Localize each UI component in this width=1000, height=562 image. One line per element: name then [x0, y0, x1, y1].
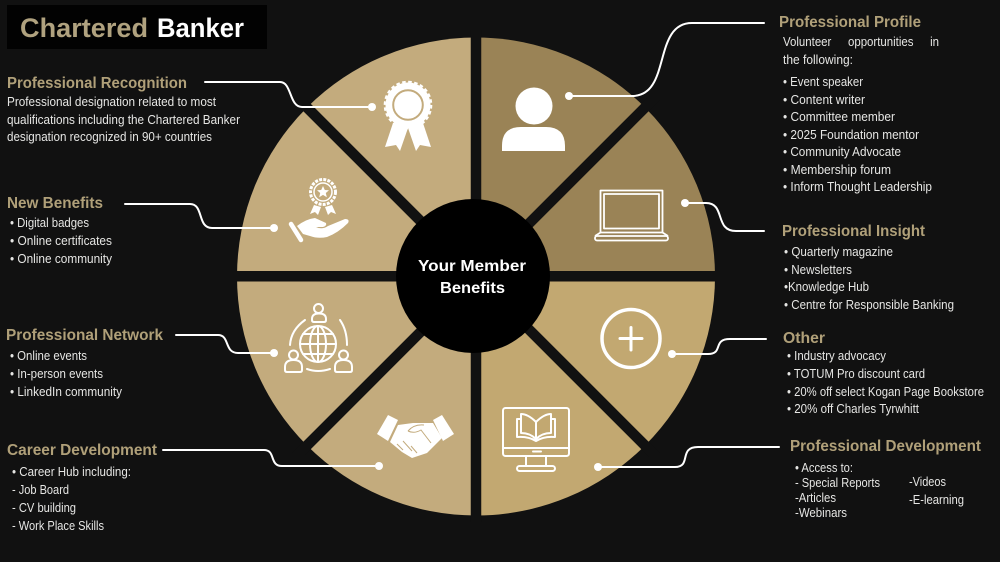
text block: New Benefits: • Online certificates — [10, 233, 112, 248]
text block: Other: Other — [783, 330, 825, 347]
text block: Professional Profile: Volunteer opportunities in — [783, 34, 939, 49]
logo: Chartered Banker: Chartered — [20, 13, 148, 43]
text block: Professional Insight: Professional Insight — [782, 223, 926, 240]
logo: Chartered Banker: Banker — [157, 13, 244, 43]
text block: Professional Profile: • Community Advocate — [783, 144, 901, 159]
icon: award rosette — [385, 82, 431, 151]
text block: Career Development — [7, 442, 158, 533]
connector: Professional Insight — [681, 199, 764, 231]
connector: New Benefits — [125, 204, 278, 232]
text block: Professional Network: Professional Network — [6, 327, 163, 344]
text block: Career Development: - Work Place Skills — [12, 518, 104, 533]
centre circle: Your Member Benefits — [396, 199, 550, 353]
wedge: bottom right — [476, 276, 645, 516]
text block: Professional Network: • LinkedIn community — [10, 384, 123, 399]
text block: Professional Development: -Articles — [795, 490, 836, 505]
text block: Professional Network — [6, 327, 163, 399]
centre circle: Your Member Benefits: Your Member — [418, 258, 526, 275]
text block: Professional Profile: • Membership forum — [783, 162, 891, 177]
icon: globe network — [285, 304, 352, 372]
icon: hand holding badge — [291, 180, 349, 240]
text block: Professional Insight: • Centre for Responsible Banking — [784, 297, 954, 312]
text block: Career Development: - CV building — [12, 500, 76, 515]
connector: Other — [668, 339, 766, 358]
text block: Professional Profile: • Inform Thought Leadership — [783, 179, 932, 194]
text block: New Benefits: • Online community — [10, 251, 113, 266]
wedge: upper right — [476, 108, 715, 276]
centre circle: Your Member Benefits: Benefits — [440, 280, 505, 297]
text block: Career Development: Career Development — [7, 442, 158, 459]
text block: Professional Profile — [779, 14, 939, 194]
text block: Professional Recognition: Professional Recognition — [7, 75, 187, 92]
text block: Professional Recognition — [7, 75, 241, 144]
text block: Professional Insight: • Newsletters — [784, 262, 852, 277]
wedge: lower left — [237, 276, 476, 446]
text block: Professional Development — [790, 438, 982, 520]
text block: Professional Development: -Videos — [909, 474, 946, 489]
text block: Other — [783, 330, 984, 416]
text block: Professional Network: • Online events — [10, 348, 87, 363]
text block: Professional Network: • In-person events — [10, 366, 103, 381]
text block: Other: • TOTUM Pro discount card — [787, 366, 925, 381]
text block: Professional Development: -E-learning — [909, 492, 964, 507]
wedge: top right — [476, 38, 645, 276]
icon: monitor with book — [503, 408, 569, 471]
text block: Career Development: - Job Board — [12, 482, 69, 497]
text block: Professional Profile: • Content writer — [783, 92, 866, 107]
text block: Professional Profile: • Committee member — [783, 109, 896, 124]
text block: Professional Development: - Special Reports — [795, 475, 880, 490]
connector: Professional Recognition — [205, 82, 376, 111]
text block: Other: • 20% off Charles Tyrwhitt — [787, 401, 919, 416]
text block: New Benefits: • Digital badges — [10, 215, 89, 230]
connector: Professional Development — [594, 447, 779, 471]
connector: Professional Profile — [565, 23, 764, 100]
text block: Career Development: • Career Hub including: — [12, 464, 131, 479]
text block: Other: • Industry advocacy — [787, 348, 887, 363]
icon: laptop — [595, 190, 668, 240]
text block: Professional Insight: •Knowledge Hub — [784, 279, 869, 294]
connector: Career Development — [163, 450, 383, 470]
wedge: bottom left — [307, 276, 476, 516]
text block: Professional Recognition: designation recognized in 90+ countries — [7, 129, 212, 144]
text block: Professional Profile: • Event speaker — [783, 74, 864, 89]
text block: Professional Profile: Professional Profile — [779, 14, 921, 31]
icon: handshake — [377, 415, 454, 458]
text block: Professional Recognition: qualifications including the Chartered Banker — [7, 112, 241, 127]
text block: Professional Development: -Webinars — [795, 505, 847, 520]
wedge: top left — [307, 38, 476, 276]
text block: Professional Development: • Access to: — [795, 460, 853, 475]
logo: Chartered Banker — [7, 5, 267, 49]
connector: Professional Network — [176, 335, 278, 357]
wedge: upper left — [237, 108, 476, 276]
benefits wheel — [230, 30, 722, 522]
text block: Professional Development: Professional Development — [790, 438, 982, 455]
text block: New Benefits: New Benefits — [7, 195, 103, 212]
text block: Professional Recognition: Professional designation related to most — [7, 94, 216, 109]
text block: Professional Profile: the following: — [783, 52, 853, 67]
icon: plus in circle — [602, 310, 660, 368]
text block: Professional Profile: • 2025 Foundation mentor — [783, 127, 920, 142]
text block: Professional Insight: • Quarterly magazine — [784, 244, 893, 259]
icon: person — [502, 88, 565, 151]
text block: Professional Insight — [782, 223, 954, 312]
wedge: lower right — [476, 276, 715, 446]
text block: New Benefits — [7, 195, 113, 266]
